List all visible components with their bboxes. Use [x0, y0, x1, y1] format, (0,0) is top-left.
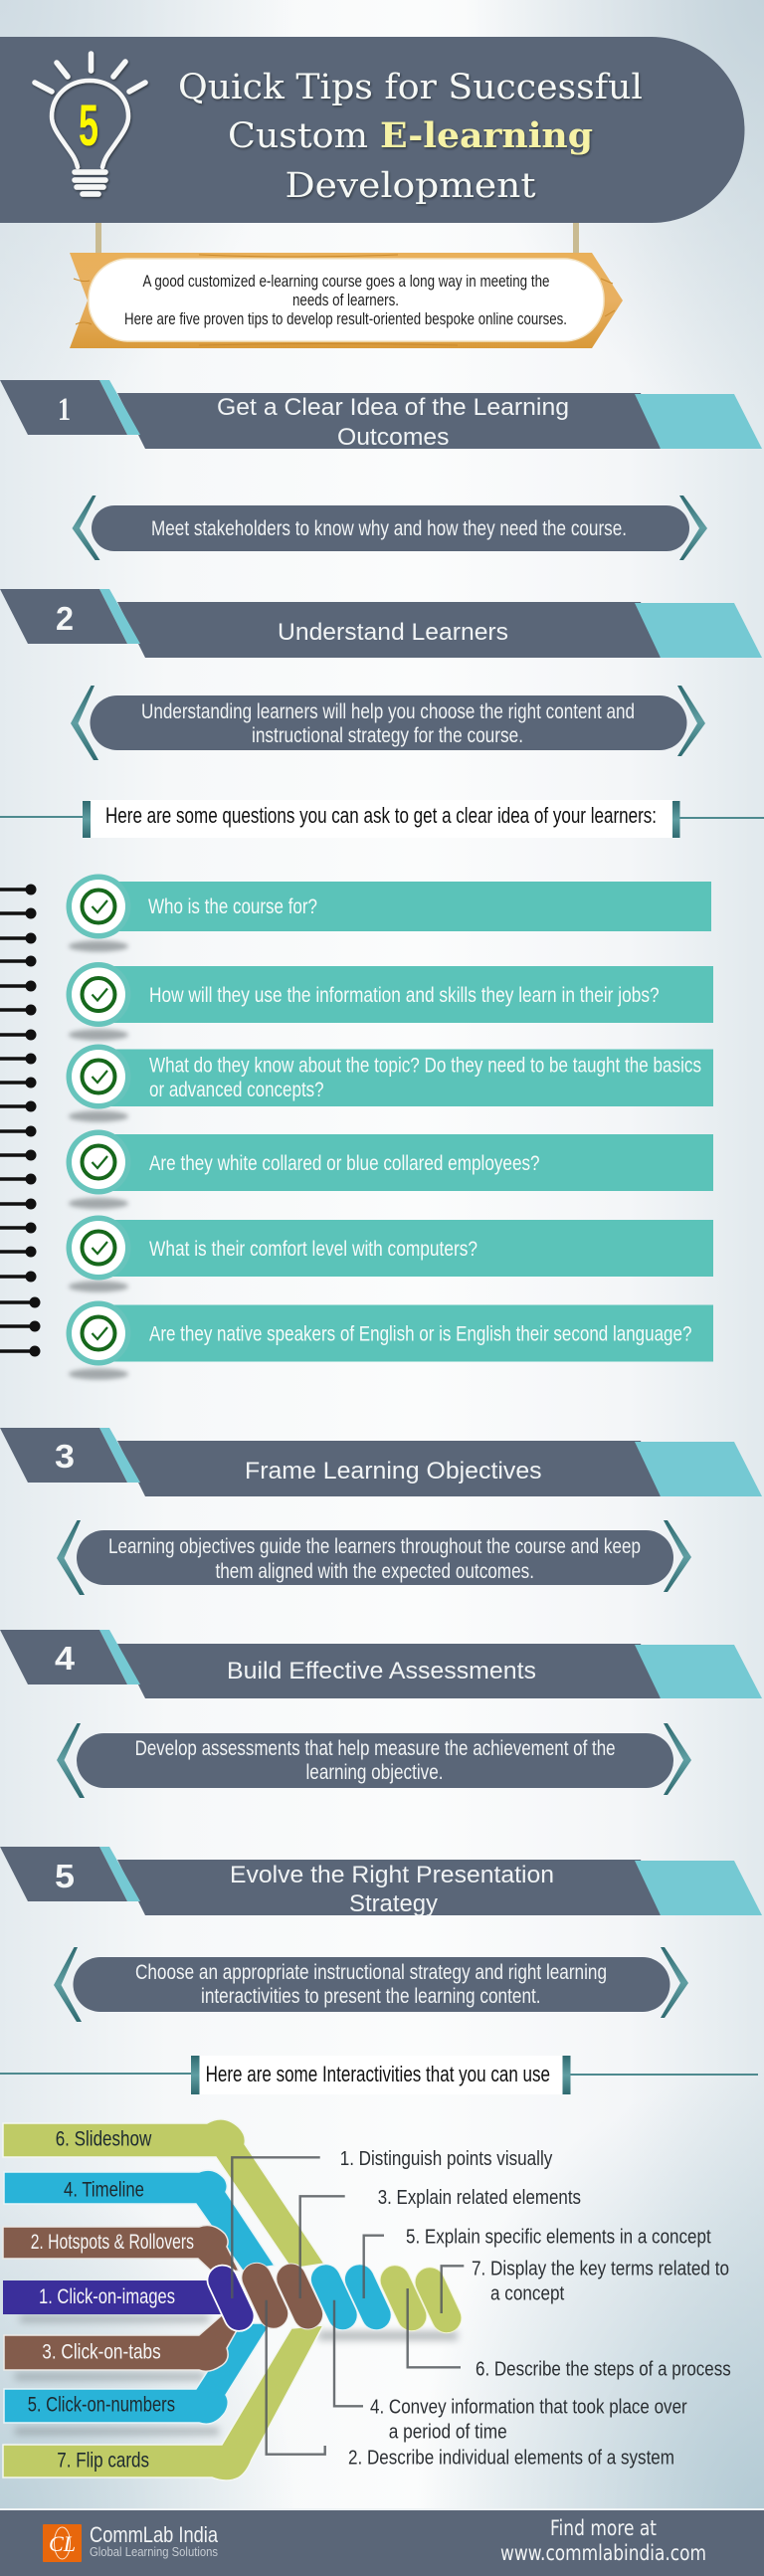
description labels: 3. Explain related elements [378, 2187, 581, 2209]
ribbon labels: 5. Click-on-numbers [28, 2393, 175, 2416]
hanging wooden sign [70, 223, 623, 348]
section 4 heading [0, 1630, 762, 1698]
twisted ribbon diagram [3, 2119, 731, 2480]
tip 3 callout [57, 1520, 691, 1595]
question 1 [66, 874, 711, 951]
title [178, 68, 643, 206]
title: Quick Tips for Successful [178, 68, 643, 107]
title: Custom [228, 116, 368, 156]
question 4: Are they white collared or blue collared employees? [149, 1151, 540, 1175]
leader lines [232, 2157, 464, 2455]
subheading: interactivities [0, 2056, 758, 2094]
icon: light bulb with 5 [35, 54, 145, 194]
section 3 heading [0, 1428, 762, 1496]
footer link text: Find more at [550, 2516, 657, 2540]
tip 1 callout [72, 495, 707, 560]
section 2 heading: Understand Learners [278, 619, 508, 646]
section 1 heading [0, 380, 762, 451]
sign text: needs of learners. [292, 291, 399, 309]
section 4 heading: 4 [55, 1640, 76, 1677]
icon: light bulb with 5: 5 [79, 94, 98, 158]
description labels: 2. Describe individual elements of a system [348, 2448, 674, 2470]
logo: CommLab India [43, 2522, 219, 2562]
question 3: or advanced concepts? [149, 1078, 324, 1101]
tip 3 callout: Learning objectives guide the learners throughout the course and keep [108, 1534, 641, 1558]
sign text: A good customized e-learning course goes a long way in meeting the [143, 272, 549, 291]
title: Development [285, 166, 535, 206]
subheading: interactivities: Here are some Interactivities that you can use [206, 2062, 550, 2086]
description labels: 1. Distinguish points visually [340, 2148, 552, 2170]
question 2 [66, 962, 713, 1041]
description labels: 5. Explain specific elements in a concept [406, 2226, 711, 2248]
ribbon: indigo strand [3, 2280, 227, 2314]
ribbon: blue strands [4, 2170, 275, 2424]
ribbon labels: 7. Flip cards [57, 2449, 149, 2472]
shadows [15, 2315, 458, 2435]
section 5 heading [0, 1847, 762, 1917]
description labels: 7. Display the key terms related to [472, 2259, 729, 2280]
section 1 heading: 1 [58, 392, 71, 428]
tip 2 callout [71, 686, 705, 760]
question 1: Who is the course for? [148, 894, 317, 918]
question 2: How will they use the information and skills they learn in their jobs? [149, 983, 660, 1007]
tip 3 callout: them aligned with the expected outcomes. [215, 1559, 534, 1583]
tip 1 callout: Meet stakeholders to know why and how they need the course. [151, 516, 627, 540]
section 5 heading: 5 [55, 1858, 75, 1894]
logo: CommLab India: Global Learning Solutions [90, 2545, 218, 2559]
logo: CommLab India: CL [49, 2531, 76, 2556]
ribbon: brown strands [3, 2226, 241, 2371]
question 5 [66, 1216, 713, 1291]
section 2 heading [0, 589, 762, 658]
ribbon labels: 1. Click-on-images [39, 2285, 175, 2308]
description labels: 4. Convey information that took place over [370, 2397, 687, 2419]
footer link text: www.commlabindia.com [500, 2541, 706, 2565]
section 2 heading: 2 [56, 600, 74, 637]
tip 5 callout: Choose an appropriate instructional strategy and right learning [135, 1960, 607, 1984]
subheading: questions [0, 800, 764, 838]
description labels: a period of time [389, 2422, 507, 2444]
tip 5 callout [54, 1947, 688, 2022]
section 5 heading: Evolve the Right Presentation [230, 1862, 554, 1888]
question 3 [66, 1045, 713, 1122]
tip 4 callout: learning objective. [306, 1760, 444, 1784]
description labels: a concept [490, 2283, 565, 2305]
footer link text [500, 2516, 706, 2565]
ribbon labels: 2. Hotspots & Rollovers [31, 2231, 194, 2254]
question 6 [66, 1301, 713, 1379]
tip 2 callout: instructional strategy for the course. [252, 723, 523, 747]
question 5: What is their comfort level with computers? [149, 1237, 478, 1261]
tip 5 callout: interactivities to present the learning content. [201, 1984, 541, 2008]
twist capsules [223, 2278, 447, 2318]
ribbon: green strands [3, 2119, 324, 2480]
tip 2 callout: Understanding learners will help you choose the right content and [141, 699, 635, 723]
ribbon labels [28, 2128, 194, 2472]
section 1 heading: Outcomes [337, 424, 450, 451]
header banner [0, 37, 745, 223]
notebook spiral decoration [0, 884, 40, 1357]
ribbon labels: 3. Click-on-tabs [42, 2341, 161, 2364]
section 5 heading: Strategy [349, 1890, 438, 1917]
tip 4 callout [57, 1723, 691, 1798]
question 4 [66, 1130, 713, 1209]
ribbon labels: 6. Slideshow [56, 2128, 152, 2151]
section 4 heading: Build Effective Assessments [227, 1658, 536, 1684]
section 3 heading: Frame Learning Objectives [245, 1458, 542, 1485]
section 3 heading: 3 [55, 1438, 75, 1475]
title: E-learning [380, 115, 593, 156]
description labels [340, 2148, 731, 2470]
section 1 heading: Get a Clear Idea of the Learning [217, 394, 569, 421]
tip 4 callout: Develop assessments that help measure the achievement of the [135, 1736, 616, 1760]
sign text [124, 272, 567, 328]
logo: CommLab India: CommLab India [90, 2522, 219, 2547]
footer [0, 2508, 764, 2576]
ribbon labels: 4. Timeline [64, 2178, 144, 2201]
sign text: Here are five proven tips to develop result-oriented bespoke online courses. [124, 309, 567, 328]
